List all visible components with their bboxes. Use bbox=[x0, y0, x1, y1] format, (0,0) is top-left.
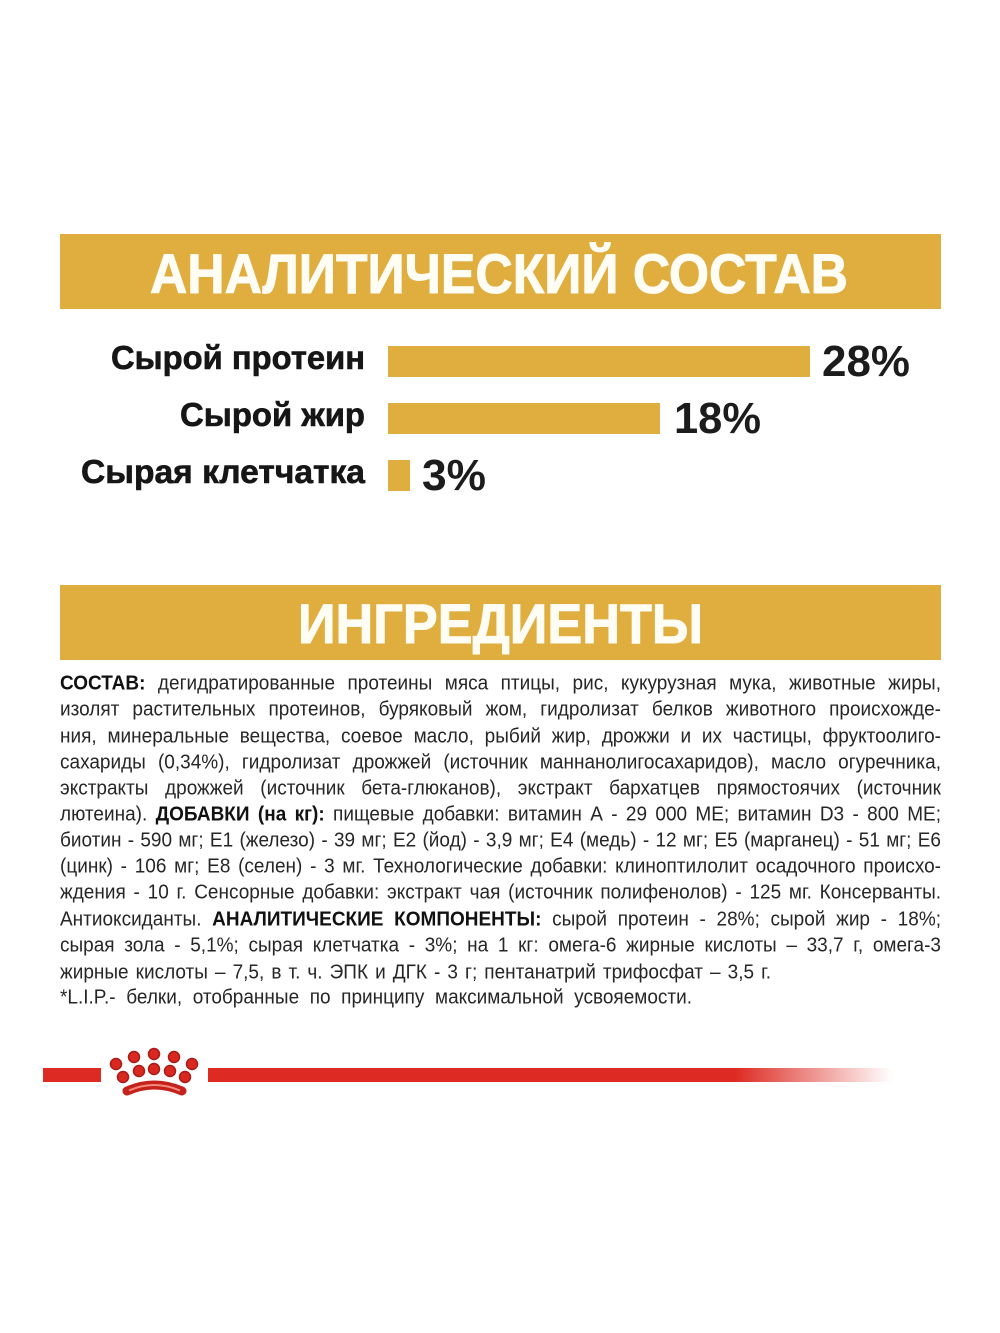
brand line with crown logo bbox=[43, 1048, 886, 1096]
bar row: crude fiber 3%: Сырая клетчатка bbox=[81, 453, 366, 490]
ingredients text block: биотин - 590 мг; Е1 (железо) - 39 мг; Е2 (йод) - 3,9 мг; Е4 (медь) - 12 мг; Е5 (марганец) - 51 мг; Е6 bbox=[60, 829, 941, 852]
ingredients text block: *L.I.P.- белки, отобранные по принципу максимальной усвояемости. bbox=[60, 986, 692, 1009]
icon: crown logo bbox=[110, 1048, 198, 1091]
bar row: crude protein 28%: Сырой протеин bbox=[111, 339, 365, 376]
ingredients text block: изолят растительных протеинов, буряковый жом, гидролизат белков животного происхожде- bbox=[60, 698, 941, 721]
bar row: crude fat 18%: Сырой жир bbox=[180, 396, 365, 433]
ingredients text block: сырая зола - 5,1%; сырая клетчатка - 3%; на 1 кг: омега-6 жирные кислоты – 33,7 г, омега-3 bbox=[60, 934, 941, 957]
bar row: crude protein 28% bbox=[111, 337, 910, 386]
red line left bbox=[43, 1068, 101, 1082]
ingredients text block: ждения - 10 г. Сенсорные добавки: экстракт чая (источник полифенолов) - 125 мг. Консерванты. bbox=[60, 881, 941, 904]
heading banner: ingredients: ИНГРЕДИЕНТЫ bbox=[298, 592, 703, 655]
bar row: crude fat 18%: 18% bbox=[674, 394, 761, 443]
ingredients text block: экстракты дрожжей (источник бета-глюканов), экстракт бархатцев прямостоячих (источник bbox=[60, 777, 941, 800]
heading banner: ingredients bbox=[60, 585, 941, 660]
ingredients text block: ния, минеральные вещества, соевое масло, рыбий жир, дрожжи и их частицы, фруктоолиго- bbox=[60, 725, 941, 748]
ingredients text block: сахариды (0,34%), гидролизат дрожжей (источник маннанолигосахаридов), масло огуречника, bbox=[60, 751, 941, 774]
bar row: crude protein 28%: 28% bbox=[822, 337, 910, 386]
bar chart: nutrient percentages bbox=[81, 337, 910, 500]
ingredients text block: СОСТАВ: дегидратированные протеины мяса птицы, рис, кукурузная мука, животные жиры, bbox=[60, 672, 941, 695]
bar row: crude fiber 3%: 3% bbox=[422, 451, 486, 500]
analytical composition section bbox=[60, 234, 941, 500]
ingredients text block: лютеина). ДОБАВКИ (на кг): пищевые добавки: витамин А - 29 000 МЕ; витамин D3 - 800 МЕ; bbox=[60, 803, 941, 826]
ingredients text block: жирные кислоты – 7,5, в т. ч. ЭПК и ДГК - 3 г; пентанатрий трифосфат – 3,5 г. bbox=[60, 961, 771, 984]
ingredients text block: (цинк) - 106 мг; Е8 (селен) - 3 мг. Технологические добавки: клиноптилолит осадочного происхо- bbox=[60, 855, 941, 878]
red line right fading out bbox=[208, 1068, 892, 1082]
ingredients text block: Антиоксиданты. АНАЛИТИЧЕСКИЕ КОМПОНЕНТЫ: сырой протеин - 28%; сырой жир - 18%; bbox=[60, 908, 941, 931]
heading banner: analytical composition: АНАЛИТИЧЕСКИЙ СОСТАВ bbox=[150, 242, 848, 305]
bar row: crude fat 18% bbox=[180, 394, 761, 443]
bar row: crude fiber 3% bbox=[81, 451, 486, 500]
